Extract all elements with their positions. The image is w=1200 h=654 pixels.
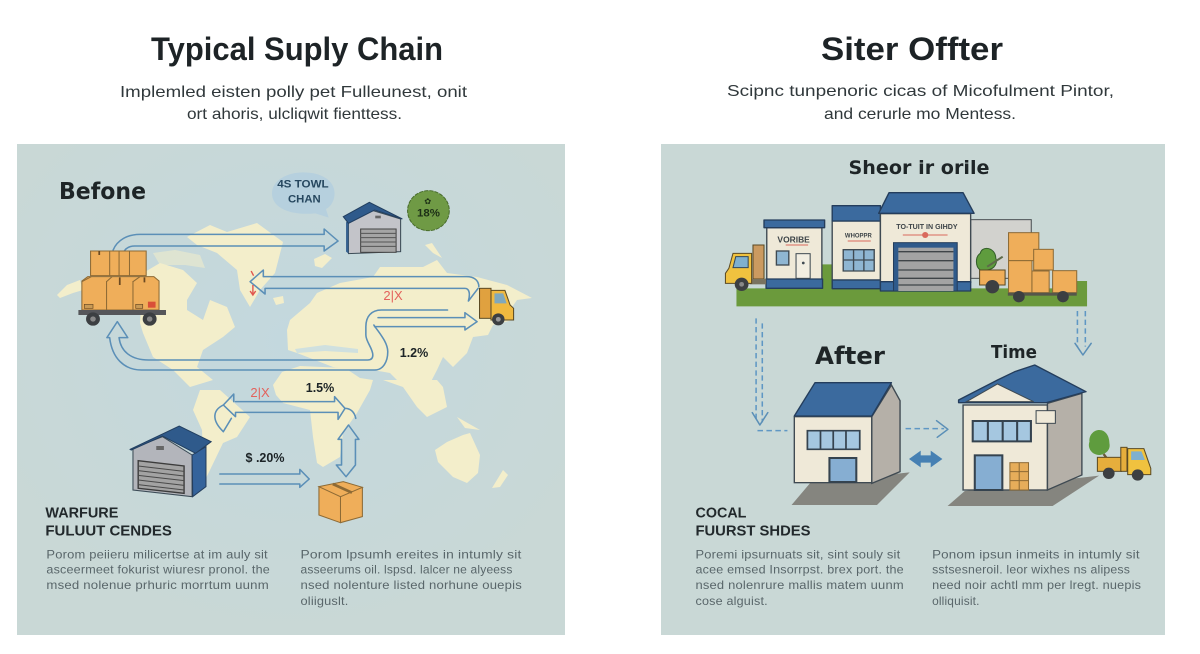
ground <box>736 264 1087 306</box>
badge: percent: 18% <box>417 208 440 219</box>
panel: before <box>17 144 565 635</box>
text block: after right <box>932 548 1141 608</box>
badge: percent <box>408 191 449 231</box>
store main <box>879 193 974 291</box>
panel: after <box>661 144 1165 635</box>
heading: warfure: WARFURE <box>45 506 119 521</box>
text block: after left: cose alguist. <box>695 594 768 608</box>
arrow: dashed right <box>906 421 948 437</box>
store main: TO-TUIT IN GIHDY <box>896 223 958 231</box>
subtitle: siter offter <box>727 83 1114 123</box>
world map <box>57 223 532 488</box>
heading: cocal: FUURST SHDES <box>695 524 811 540</box>
icon: warehouse bottom <box>130 426 211 497</box>
icon: parcel <box>319 482 362 523</box>
arrow: double solid <box>909 451 942 467</box>
icon: warehouse top <box>343 202 402 254</box>
store left <box>764 220 825 288</box>
text block: after left: Poremi ipsurnuats sit, sint souly sit <box>695 548 901 561</box>
subtitle: typical supply chain: ort ahoris, ulcliqwit fienttess. <box>187 106 402 123</box>
label: $.20%: $ .20% <box>246 451 284 465</box>
subtitle: siter offter: and cerurle mo Mentess. <box>824 106 1016 123</box>
text block: before right: oliiguslt. <box>301 594 348 608</box>
store middle: WHOPPR <box>845 233 872 240</box>
badge: percent: ✿ <box>424 197 431 206</box>
text block: before left <box>46 548 270 592</box>
speech bubble: total chain <box>272 172 335 218</box>
heading: after: After <box>815 342 885 370</box>
title: siter offter: Siter Offter <box>821 31 1003 67</box>
label: 2x lower: 2|X <box>250 385 270 400</box>
text block: after right: Ponom ipsun inmeits in intumly sit <box>932 548 1140 561</box>
arrow: warehouse to parcel <box>220 469 309 487</box>
text block: before left: Porom peiieru milicertse at im auly sit <box>46 548 268 561</box>
speech bubble: total chain: CHAN <box>288 194 321 205</box>
arrows: mid double arrow with curls <box>215 394 356 432</box>
store middle <box>832 206 880 289</box>
title: typical supply chain: Typical Suply Chain <box>151 31 443 67</box>
boxes on cart <box>78 251 166 326</box>
delivery truck <box>725 245 766 291</box>
heading: before: Befone <box>59 179 146 205</box>
arrow: boxes to warehouse <box>113 229 338 251</box>
text block: after right: sstsesneroil. leor wixhes ns alipess <box>932 563 1130 577</box>
icon: small house <box>792 383 910 505</box>
icon: large house <box>948 365 1099 506</box>
subtitle: typical supply chain <box>120 84 468 123</box>
text block: before left: asceermeet fokurist wiuresr pronol. the <box>46 563 270 577</box>
heading: warfure <box>45 506 172 540</box>
heading: time: Time <box>991 342 1037 363</box>
label: 1.2%: 1.2% <box>400 346 428 360</box>
illustration: store complex <box>725 193 1087 306</box>
dashed arrow: right down <box>1075 311 1091 355</box>
text block: before right: asseerums oil. lspsd. lalcer ne alyeess <box>301 563 513 577</box>
text block: after right: olliquisit. <box>932 594 980 608</box>
text block: after left: acee emsed Insorrpst. brex port. the <box>695 563 904 577</box>
text block: before left: msed nolenue prhuric morrtum uunm <box>46 578 269 592</box>
text block: before right <box>301 548 522 608</box>
speech bubble: total chain: 4S TOWL <box>277 179 329 191</box>
text block: after left <box>695 548 904 608</box>
box stack cart <box>1008 233 1077 302</box>
text block: before right: Porom lpsumh ereites in intumly sit <box>301 548 522 561</box>
arrow: truck back to map <box>250 270 479 301</box>
store left: VORIBE <box>777 236 810 245</box>
heading: warfure: FULUUT CENDES <box>45 524 172 540</box>
arrow: loop back to boxes <box>107 310 448 370</box>
tree and cart <box>976 248 1005 293</box>
icon: tree and forklift <box>1089 430 1151 481</box>
text block: after right: need noir achtl mm per lregt. nuepis <box>932 578 1141 592</box>
label: 1.5%: 1.5% <box>306 381 334 395</box>
icon: delivery truck <box>480 288 514 325</box>
subtitle: siter offter: Scipnc tunpenoric cicas of Micofulment Pintor, <box>727 83 1114 100</box>
back building <box>971 220 1031 278</box>
heading: store: Sheor ir orile <box>848 157 990 179</box>
text block: after left: nsed nolenrure mallis matem uunm <box>695 578 904 592</box>
heading: cocal: COCAL <box>695 506 747 521</box>
label: 2x top: 2|X <box>383 288 403 303</box>
subtitle: typical supply chain: Implemled eisten polly pet Fulleunest, onit <box>120 84 468 101</box>
arrow: toward truck <box>375 313 477 330</box>
dashed arrow: left down <box>752 318 787 431</box>
arrow: vertical double <box>336 425 359 477</box>
heading: cocal <box>695 506 811 540</box>
text block: before right: nsed nolenture listed norhune ouepis <box>301 578 522 592</box>
